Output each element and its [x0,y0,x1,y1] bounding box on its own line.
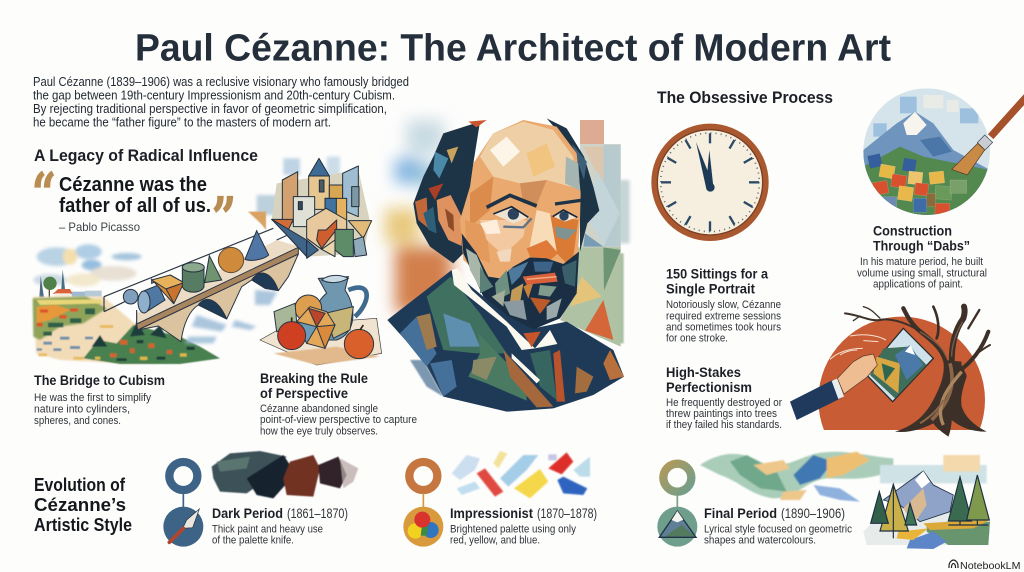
timeline: final period [657,452,990,549]
text: impressionist: Impressionist [450,505,533,521]
coat [387,270,624,412]
heading: evolution of style: Artistic Style [34,515,132,535]
cubist landscape [863,471,990,549]
text: bridge to cubism: spheres, and cones. [34,415,121,427]
text: impressionist [450,505,597,546]
text: breaking the rule of perspective: Cézanne abandoned single [260,403,378,415]
text: construction through dabs: volume using small, structural [857,268,987,280]
title: Paul Cézanne: The Architect of Modern Art [135,28,891,70]
distant village [39,269,102,298]
intro text: he became the “father figure” to the masters of modern art. [33,116,331,130]
paint strokes: dark palette [212,451,358,498]
text: impressionist: (1870–1878) [537,506,597,521]
text: 150 sittings [666,266,781,344]
text: bridge to cubism [34,372,165,427]
intro text: Paul Cézanne (1839–1906) was a reclusive visionary who famously bridged [33,75,409,89]
text: breaking the rule of perspective: how the eye truly observes. [260,426,378,438]
heading: legacy: A Legacy of Radical Influence [34,147,258,165]
text: bridge to cubism: He was the first to simplify [34,392,151,404]
text: dark period [212,505,348,546]
text: 150 sittings: required extreme sessions [666,310,781,322]
field with flowers and sandy path [33,297,220,364]
intro text: By rejecting traditional perspective in favor of geometric simplification, [33,102,387,116]
intro text: the gap between 19th-century Impressionism and 20th-century Cubism. [33,88,395,102]
text: construction through dabs: Construction [873,222,952,238]
text: high-stakes perfectionism: High-Stakes [666,364,741,380]
portrait of Cézanne [385,118,630,412]
icon: ring and triangle mountain [657,464,697,547]
illustration: throwing a painting into a tree [790,304,991,437]
text: high-stakes perfectionism: if they failed his standards. [666,419,782,431]
text: construction through dabs [857,222,987,290]
text: impressionist: red, yellow, and blue. [450,534,540,546]
text: 150 sittings: Notoriously slow, Cézanne [666,299,781,311]
text: construction through dabs: Through “Dabs” [873,238,970,254]
beard [462,233,579,329]
text: high-stakes perfectionism: threw paintings into trees [666,408,777,420]
geometric solids [123,231,269,313]
illustration: cubist city [248,157,372,258]
ear [437,195,462,246]
text: final period: (1890–1906) [781,506,845,521]
NotebookLM logo: NotebookLM [960,560,1020,572]
text: dark period: Dark Period [212,505,283,521]
illustration: still life with jug [260,275,382,365]
text: dark period: Thick paint and heavy use [212,524,323,536]
reflections in water [185,290,277,343]
text: breaking the rule of perspective [260,370,417,438]
paint strokes: bright palette [452,451,590,498]
text: 150 sittings: 150 Sittings for a [666,266,768,282]
text: final period [704,505,852,546]
collar [452,268,557,383]
text: high-stakes perfectionism [666,364,782,431]
text: construction through dabs: In his mature period, he built [860,256,983,268]
sky [33,244,142,287]
icon: mountain painted in dabs with brush [863,88,1024,215]
quote: ” [212,185,236,249]
text: final period: Lyrical style focused on geometric [704,524,852,536]
heading: evolution of style: Cézanne’s [34,495,126,515]
text: 150 sittings: Single Portrait [666,280,755,296]
motion lines [830,335,886,359]
text: 150 sittings: for one stroke. [666,332,728,344]
text: 150 sittings: and sometimes took hours [666,322,781,334]
watercolour wash [700,452,987,502]
bridge [104,228,299,342]
illustration: bridge from landscape to geometry [33,228,299,364]
quote: – Pablo Picasso [59,220,140,234]
text: breaking the rule of perspective: of Perspective [260,385,348,401]
timeline: dark period [163,451,358,547]
icon: clock [651,124,769,241]
text: bridge to cubism: nature into cylinders, [34,404,130,416]
quote: father of all of us. [59,195,211,217]
timeline: impressionist [403,451,597,547]
text: breaking the rule of perspective: Breaking the Rule [260,370,368,386]
heading: obsessive process: The Obsessive Process [657,89,833,107]
quote [32,161,236,249]
quote: “ [32,161,56,225]
text: construction through dabs: applications of paint. [873,278,963,290]
heading: evolution of style [34,475,132,535]
text: final period: Final Period [704,505,777,521]
text: dark period: (1861–1870) [287,506,348,521]
intro text [33,75,409,130]
quote: Cézanne was the [59,174,207,196]
face [460,120,583,283]
text: dark period: of the palette knife. [212,534,294,546]
painting [865,328,933,402]
text: breaking the rule of perspective: point-of-view perspective to capture [260,414,417,426]
tree [845,307,990,437]
icon: ring and palette knife [163,462,203,547]
heading: evolution of style: Evolution of [34,475,126,495]
text: high-stakes perfectionism: He frequently destroyed or [666,397,782,409]
text: impressionist: Brightened palette using only [450,524,576,536]
icon: ring and colour circles [403,462,443,547]
arm and hand [790,354,877,420]
hair [413,118,599,263]
text: bridge to cubism: The Bridge to Cubism [34,372,165,388]
painted background [385,120,630,347]
text: high-stakes perfectionism: Perfectionism [666,379,752,395]
text: final period: shapes and watercolours. [704,534,816,546]
